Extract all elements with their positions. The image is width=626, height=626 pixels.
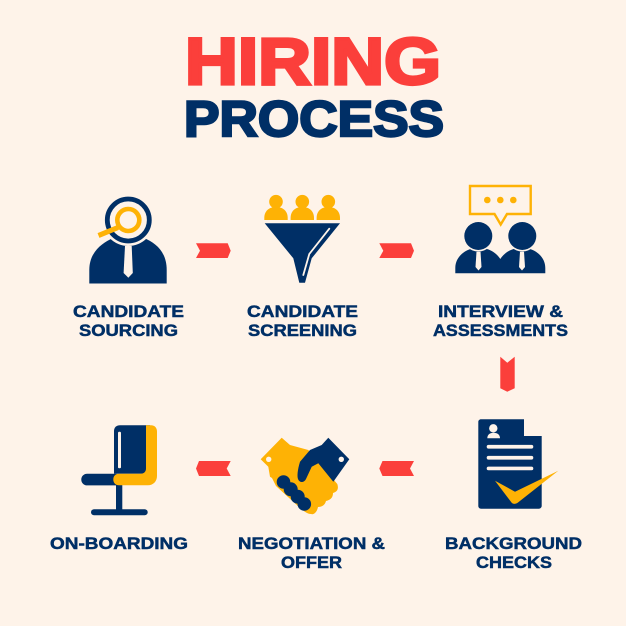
- label: background checks: CHECKS: [476, 553, 552, 572]
- arrow: [196, 461, 231, 476]
- label: on-boarding: ON-BOARDING: [50, 534, 188, 553]
- label: candidate sourcing: SOURCING: [79, 321, 178, 340]
- arrow: [196, 243, 231, 258]
- label: interview and assessments: ASSESSMENTS: [433, 321, 568, 340]
- title: HIRING: [185, 24, 441, 98]
- label: background checks: [445, 534, 582, 572]
- arrow: [500, 357, 515, 392]
- icon: funnel with people: [264, 195, 340, 283]
- icon: candidate with magnifier: [89, 194, 167, 284]
- icon: handshake: [261, 438, 349, 514]
- label: interview and assessments: INTERVIEW &: [438, 302, 563, 321]
- title: [184, 24, 444, 147]
- label: candidate screening: [247, 302, 358, 340]
- icon: interview: [455, 186, 545, 273]
- label: candidate screening: CANDIDATE: [247, 302, 358, 321]
- label: negotiation and offer: NEGOTIATION &: [238, 534, 385, 553]
- label: background checks: BACKGROUND: [445, 534, 582, 553]
- icon: chair: [81, 425, 157, 515]
- label: interview and assessments: [433, 302, 568, 340]
- arrow: [379, 243, 414, 258]
- label: candidate sourcing: [73, 302, 184, 340]
- title: PROCESS: [184, 91, 444, 147]
- label: negotiation and offer: OFFER: [281, 553, 342, 572]
- label: candidate screening: SCREENING: [248, 321, 357, 340]
- icon: background check document: [478, 419, 558, 509]
- arrow: [379, 461, 414, 476]
- label: candidate sourcing: CANDIDATE: [73, 302, 184, 321]
- label: negotiation and offer: [238, 534, 385, 572]
